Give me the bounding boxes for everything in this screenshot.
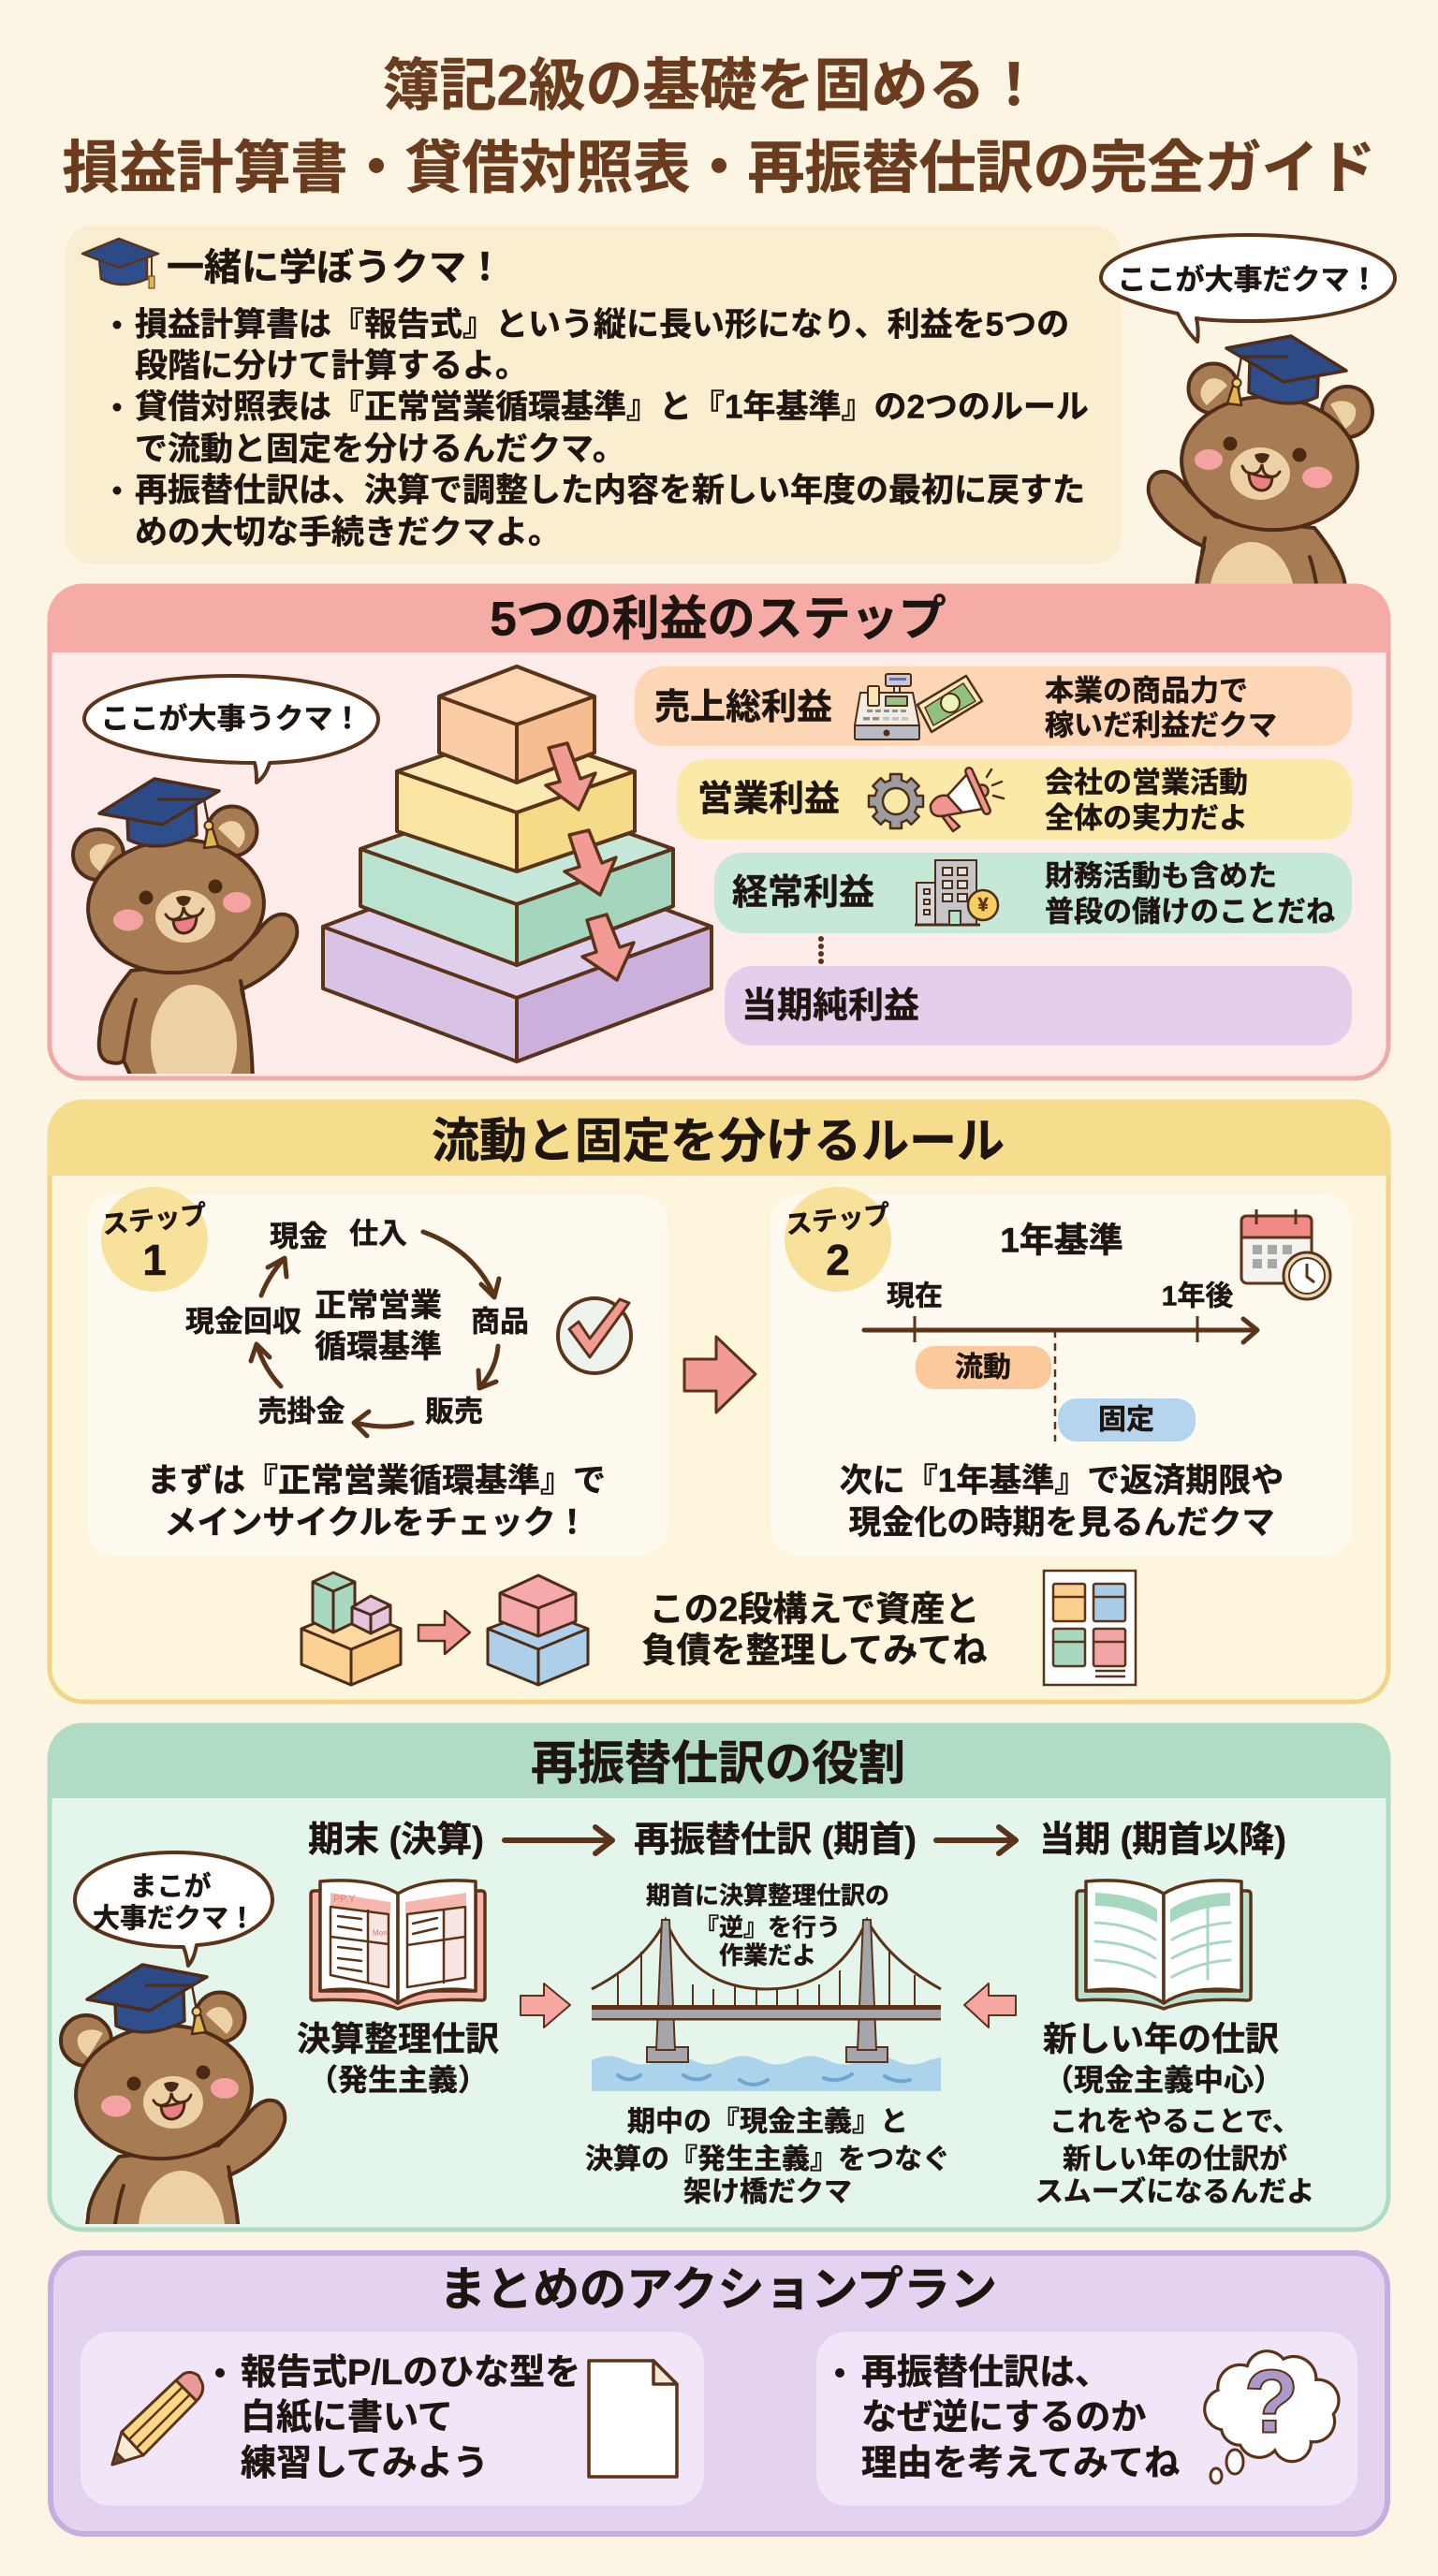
section header band xyxy=(48,1100,1390,1176)
step badge 2: 2 xyxy=(826,1236,850,1284)
icon: mixed blocks xyxy=(301,1573,401,1685)
row: ordinary profit: 普段の儲けのことだね xyxy=(1045,895,1335,929)
panel: current and fixed rule xyxy=(48,1100,1390,1702)
row: ordinary profit xyxy=(714,853,1352,933)
layer: orange xyxy=(439,666,594,783)
icon: calendar xyxy=(1241,1209,1330,1299)
cycle diagram: 売掛金 xyxy=(258,1395,345,1428)
cycle diagram: 仕入 xyxy=(349,1217,407,1251)
row: net profit xyxy=(725,966,1352,1046)
step badge 1 xyxy=(101,1187,208,1292)
intro bullets xyxy=(112,307,1089,550)
action 2 text: 再振替仕訳は、 xyxy=(861,2353,1110,2393)
step 2 caption: 現金化の時期を見るんだクマ xyxy=(848,1505,1275,1541)
timeline: 現在 xyxy=(887,1281,943,1312)
closing book label xyxy=(297,2020,499,2097)
bridge bottom text: 架け橋だクマ xyxy=(683,2177,852,2207)
card: action 2 xyxy=(816,2332,1357,2506)
new year book label xyxy=(1043,2020,1284,2097)
timeline: 1年後 xyxy=(1162,1281,1233,1312)
action 1 text: 報告式P/Lのひな型を xyxy=(241,2353,580,2393)
fixed pill xyxy=(1058,1398,1196,1442)
arrow: step 2 xyxy=(565,830,616,895)
bridge bottom text: 決算の『発生主義』をつなぐ xyxy=(585,2144,950,2175)
right text: スムーズになるんだよ xyxy=(1035,2175,1314,2207)
summary text xyxy=(642,1589,987,1670)
row: gross profit: 本業の商品力で xyxy=(1045,674,1248,708)
action 2 text xyxy=(835,2353,1180,2483)
row: operating profit: 会社の営業活動 xyxy=(1045,766,1248,799)
intro bullets: 再振替仕訳は、決算で調整した内容を新しい年度の最初に戻すた xyxy=(135,472,1085,509)
bridge top text: 作業だよ xyxy=(719,1941,816,1969)
action 2 text: 理由を考えてみてね xyxy=(861,2444,1180,2483)
icon: pencil xyxy=(112,2372,203,2465)
step 2 caption xyxy=(840,1462,1284,1541)
action 1 text: 練習してみよう xyxy=(241,2444,489,2483)
icon: new year book xyxy=(1077,1881,1251,2009)
section header band xyxy=(48,584,1390,652)
arrow: from closing xyxy=(521,1983,570,2027)
icon: blank paper xyxy=(589,2361,677,2477)
action 1 text xyxy=(215,2353,580,2483)
row: operating profit: 全体の実力だよ xyxy=(1045,801,1248,835)
cycle diagram xyxy=(185,1217,529,1436)
arrow: blocks xyxy=(418,1611,470,1654)
icon: check mark xyxy=(558,1298,631,1373)
step 1 caption: まずは『正常営業循環基準』で xyxy=(147,1462,606,1500)
cycle diagram: 現金 xyxy=(270,1221,328,1252)
card: step 2 xyxy=(770,1187,1352,1556)
row: net profit: 当期純利益 xyxy=(741,987,919,1026)
current pill: 流動 xyxy=(955,1352,1011,1383)
row: gross profit xyxy=(635,666,1352,746)
section heading: 再振替仕訳の役割 xyxy=(531,1737,905,1790)
arrow: step1 to step2 xyxy=(684,1337,756,1412)
intro bullets: 段階に分けて計算するよ。 xyxy=(135,348,528,384)
bridge top text: 期首に決算整理仕訳の xyxy=(646,1881,889,1910)
step 2 heading: 1年基準 xyxy=(1000,1221,1123,1260)
action 2 text: なぜ逆にするのか xyxy=(861,2398,1146,2437)
section heading: 5つの利益のステップ xyxy=(490,592,946,646)
current pill xyxy=(916,1346,1051,1389)
timeline header xyxy=(308,1821,1286,1860)
summary text: この2段構えで資産と xyxy=(650,1589,979,1629)
timeline header: 再振替仕訳 (期首) xyxy=(634,1821,917,1860)
icon: building xyxy=(915,860,980,925)
bear: section 4 xyxy=(59,1963,286,2224)
bridge bottom text xyxy=(585,2106,950,2207)
icon: megaphone xyxy=(931,769,1004,831)
card: action 1 xyxy=(81,2332,704,2506)
speech bubble xyxy=(84,676,378,783)
panel: intro xyxy=(66,226,1121,564)
panel: reversing entries xyxy=(48,1723,1390,2289)
cycle diagram: 正常営業 xyxy=(315,1288,442,1324)
intro bullets: で流動と固定を分けるんだクマ。 xyxy=(135,431,625,468)
speech bubble: 大事だクマ！ xyxy=(93,1903,256,1934)
icon: closing book xyxy=(311,1881,485,2009)
intro bullets: めの大切な手続きだクマよ。 xyxy=(135,515,561,550)
icon: gear xyxy=(869,774,923,828)
intro bullets: 損益計算書は『報告式』という縦に長い形になり、利益を5つの xyxy=(135,307,1069,343)
panel: five profit steps xyxy=(48,584,1390,1103)
icon: closing book: PP.Y xyxy=(333,1894,356,1905)
step badge 2 xyxy=(785,1187,891,1292)
row: operating profit: 営業利益 xyxy=(697,780,840,819)
cycle diagram: 循環基準 xyxy=(315,1329,442,1365)
intro bullets: 貸借対照表は『正常営業循環基準』と『1年基準』の2つのルール xyxy=(135,389,1089,425)
icon: banknote xyxy=(917,676,982,732)
speech bubble: top right xyxy=(1101,235,1395,342)
layer: purple xyxy=(323,854,712,1061)
icon: thought cloud: ? xyxy=(1244,2351,1299,2452)
step badge 1: ステップ xyxy=(101,1200,208,1239)
summary text: 負債を整理してみてね xyxy=(642,1631,987,1670)
right text: これをやることで、 xyxy=(1049,2106,1300,2138)
layer: green xyxy=(360,794,673,965)
arrow: step 3 xyxy=(582,915,634,980)
new year book label: （現金主義中心） xyxy=(1044,2063,1284,2097)
section header band xyxy=(48,1723,1390,1798)
title xyxy=(62,53,1376,199)
speech bubble xyxy=(75,1852,272,1966)
bridge top text: 『逆』を行う xyxy=(695,1913,841,1941)
bridge bottom text: 期中の『現金主義』と xyxy=(627,2106,908,2138)
icon: sorted blocks xyxy=(488,1575,588,1685)
cycle diagram: 商品 xyxy=(471,1305,529,1339)
pyramid xyxy=(323,666,712,1061)
layer: yellow xyxy=(397,730,635,871)
arrow xyxy=(936,1827,1016,1853)
title: 損益計算書・貸借対照表・再振替仕訳の完全ガイド xyxy=(62,136,1376,199)
row: ordinary profit: 財務活動も含めた xyxy=(1045,859,1277,893)
new year book label: 新しい年の仕訳 xyxy=(1043,2020,1279,2057)
arrow xyxy=(505,1827,612,1853)
action 1 text: 白紙に書いて xyxy=(241,2398,453,2437)
step 2 caption: 次に『1年基準』で返済期限や xyxy=(840,1462,1284,1500)
panel: action plan xyxy=(51,2253,1387,2534)
right text: 新しい年の仕訳が xyxy=(1063,2144,1287,2175)
title: 簿記2級の基礎を固める！ xyxy=(383,53,1042,117)
bear: section 2 xyxy=(73,779,297,1103)
timeline xyxy=(864,1281,1257,1442)
closing book label: （発生主義） xyxy=(308,2063,488,2097)
arrow: step 1 xyxy=(546,743,595,810)
cycle diagram: 販売 xyxy=(425,1395,483,1428)
intro heading: 一緒に学ぼうクマ！ xyxy=(167,247,504,288)
fixed pill: 固定 xyxy=(1098,1404,1154,1436)
icon: graduation cap xyxy=(82,239,158,288)
row: gross profit: 稼いだ利益だクマ xyxy=(1045,710,1277,741)
dotted connector xyxy=(818,936,824,964)
icon: yen coin: ¥ xyxy=(977,895,989,915)
right text xyxy=(1035,2106,1314,2207)
step 1 caption: メインサイクルをチェック！ xyxy=(164,1505,589,1541)
row: operating profit xyxy=(677,759,1352,840)
speech bubble: ここが大事うクマ！ xyxy=(101,702,361,736)
bear: top right xyxy=(1149,336,1372,660)
closing book label: 決算整理仕訳 xyxy=(297,2020,499,2057)
icon: thought cloud xyxy=(1205,2351,1339,2483)
section heading: 流動と固定を分けるルール xyxy=(432,1114,1005,1168)
step 1 caption xyxy=(147,1462,606,1541)
bridge xyxy=(592,1920,941,2091)
icon: cash register xyxy=(855,674,919,739)
cycle diagram: 現金回収 xyxy=(185,1305,301,1339)
timeline header: 当期 (期首以降) xyxy=(1039,1821,1286,1860)
arrow: from new year xyxy=(964,1983,1016,2027)
row: gross profit: 売上総利益 xyxy=(654,688,832,727)
icon: closing book: Mon xyxy=(373,1928,388,1938)
speech bubble: top right: ここが大事だクマ！ xyxy=(1118,264,1378,296)
row: ordinary profit: 経常利益 xyxy=(732,873,874,913)
section heading: まとめのアクションプラン xyxy=(439,2263,997,2316)
speech bubble: まこが xyxy=(129,1870,212,1902)
card: step 1 xyxy=(87,1187,668,1556)
icon: yen coin xyxy=(968,890,998,920)
step badge 2: ステップ xyxy=(785,1200,891,1239)
timeline header: 期末 (決算) xyxy=(308,1821,484,1860)
icon: balance sheet xyxy=(1044,1571,1136,1685)
bridge top text xyxy=(646,1881,889,1969)
step badge 1: 1 xyxy=(142,1236,167,1284)
